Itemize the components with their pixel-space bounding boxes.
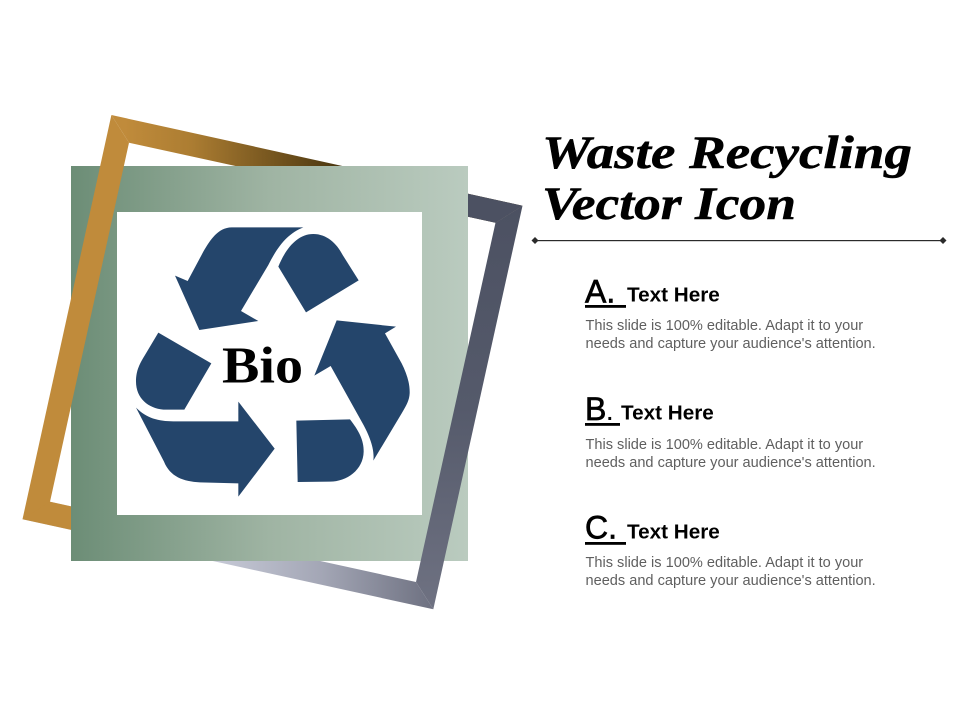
heading B: .	[607, 403, 613, 425]
panel: white inner square	[117, 212, 422, 515]
heading A	[585, 274, 720, 310]
heading B: Text Here	[621, 402, 714, 424]
divider line with diamonds	[532, 237, 946, 244]
panel: green square	[71, 166, 468, 561]
item B	[585, 391, 876, 471]
icon label: Bio: Bio	[222, 338, 303, 394]
heading C: C.	[585, 510, 617, 546]
title: Waste Recycling	[542, 127, 912, 179]
icon: lower right block	[296, 419, 364, 482]
icon: bottom arrow	[136, 402, 275, 497]
heading A: Text Here	[627, 284, 720, 306]
item C	[585, 510, 876, 589]
description A	[586, 318, 876, 352]
icon: top arrow	[175, 227, 303, 330]
frame: right bar	[416, 206, 522, 609]
frame: left bar	[22, 115, 129, 519]
frame: bottom left bar segment	[22, 500, 90, 534]
icon: right arrow	[314, 320, 410, 461]
description C: This slide is 100% editable. Adapt it to your	[586, 555, 863, 571]
title: Vector Icon	[542, 178, 796, 230]
icon: top block	[278, 234, 359, 312]
tilted square frame with green panel	[22, 115, 522, 609]
description C	[586, 555, 876, 589]
item A	[585, 274, 876, 352]
icon: left block	[136, 333, 211, 410]
heading C: Text Here	[627, 520, 720, 544]
description B	[586, 437, 876, 471]
title	[542, 127, 912, 230]
frame: top right bar segment	[460, 192, 522, 223]
frame: bottom bar	[22, 502, 433, 609]
heading B	[585, 391, 714, 427]
description B: This slide is 100% editable. Adapt it to your	[586, 437, 863, 453]
description A: needs and capture your audience's attention.	[586, 336, 876, 352]
heading B: B	[585, 391, 606, 427]
description B: needs and capture your audience's attention.	[586, 455, 876, 471]
icon: recycling symbol	[136, 227, 410, 497]
heading C	[585, 510, 720, 546]
description A: This slide is 100% editable. Adapt it to your	[586, 318, 863, 334]
heading A: A.	[585, 274, 615, 310]
frame: top bar	[111, 115, 523, 223]
description C: needs and capture your audience's attention.	[586, 573, 876, 589]
